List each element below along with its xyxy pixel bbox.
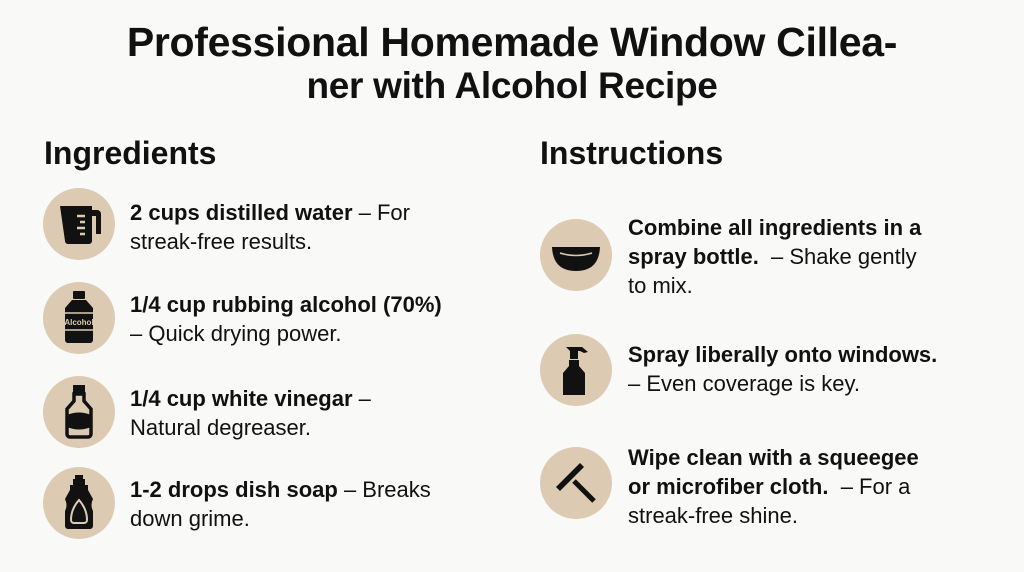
title <box>127 19 897 106</box>
text: step 1: to mix. <box>628 273 693 298</box>
icon: vinegar bottle <box>43 376 115 448</box>
text: step 3: streak-free shine. <box>628 503 798 528</box>
text: step 3 <box>628 445 919 528</box>
panel: ingredients <box>43 188 442 539</box>
icon: alcohol bottle <box>43 282 115 354</box>
text: vinegar: Natural degreaser. <box>130 415 311 440</box>
icon: measuring cup <box>43 188 115 260</box>
icon: alcohol bottle: Alcohol <box>64 318 94 327</box>
panel: instructions <box>540 215 937 528</box>
text: dish soap: 1-2 drops dish soap – Breaks <box>130 477 431 502</box>
heading: instructions: Instructions <box>540 135 723 171</box>
title: Professional Homemade Window Cillea- <box>127 19 897 65</box>
text: dish soap: down grime. <box>130 506 250 531</box>
text: step 3: or microfiber cloth. – For a <box>628 474 910 499</box>
text: step 2: Spray liberally onto windows. <box>628 342 937 367</box>
text: water: 2 cups distilled water – For <box>130 200 410 225</box>
text: dish soap <box>130 477 431 531</box>
text: step 2: – Even coverage is key. <box>628 371 860 396</box>
text: step 1: Combine all ingredients in a <box>628 215 921 240</box>
icon: spray bottle <box>540 334 612 406</box>
text: alcohol: – Quick drying power. <box>130 321 342 346</box>
title: ner with Alcohol Recipe <box>306 65 718 106</box>
text: step 1: spray bottle. – Shake gently <box>628 244 917 269</box>
icon: bowl <box>540 219 612 291</box>
text: water <box>130 200 410 254</box>
heading: ingredients: Ingredients <box>44 135 216 171</box>
icon: dish soap <box>43 467 115 539</box>
text: alcohol: 1/4 cup rubbing alcohol (70%) <box>130 292 442 317</box>
text: vinegar <box>130 386 371 440</box>
text: vinegar: 1/4 cup white vinegar – <box>130 386 371 411</box>
text: water: streak-free results. <box>130 229 312 254</box>
text: alcohol <box>130 292 442 346</box>
text: step 2 <box>628 342 937 396</box>
text: step 1 <box>628 215 922 298</box>
text: step 3: Wipe clean with a squeegee <box>628 445 919 470</box>
icon: squeegee <box>540 447 612 519</box>
